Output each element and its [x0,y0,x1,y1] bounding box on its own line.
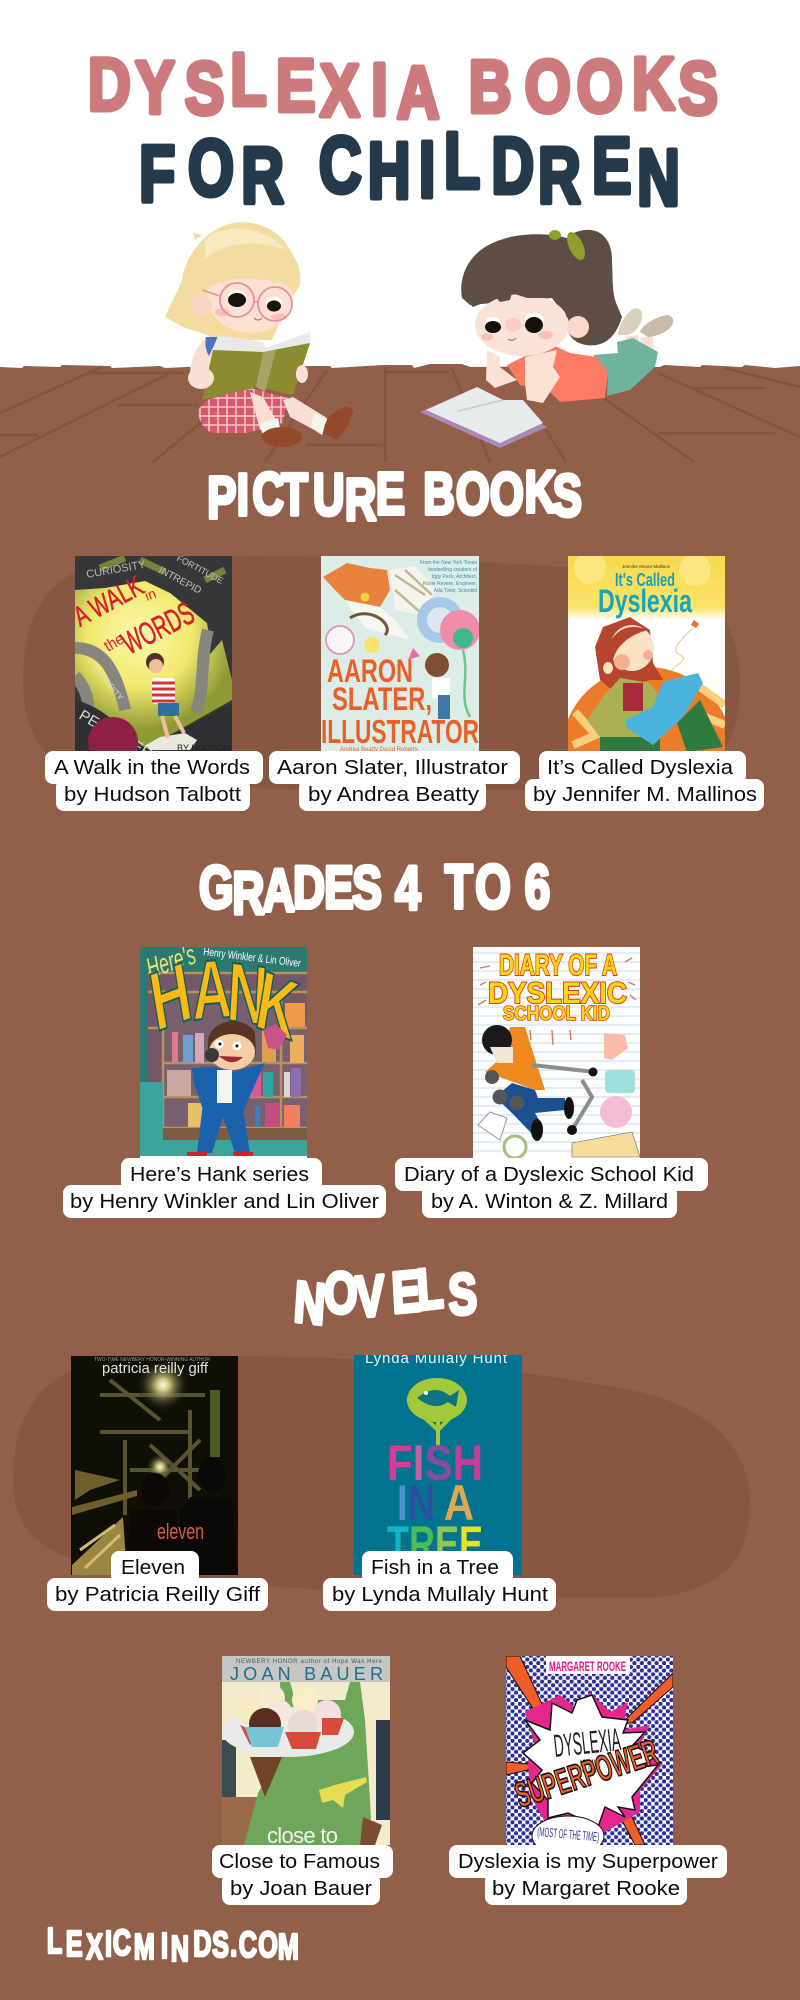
label: Here's Hank series [63,1158,386,1218]
label: Aaron Slater, Illustrator [269,751,520,811]
book cover: A Walk in the Words: INTEGRITY [90,664,125,702]
book cover: A Walk in the Words: PERSEVERE [76,707,164,767]
book cover: Dyslexia is my Superpower: IS MY [580,1757,598,1778]
book cover: Fish in a Tree: IN [397,1475,435,1531]
book cover: A Walk in the Words [75,556,232,751]
label: Fish in a Tree: by Lynda Mullaly Hunt [332,1583,548,1606]
illustration: dark-haired girl lying with book [420,229,673,448]
label: Eleven [47,1551,268,1611]
label: Close to Famous: Close to Famous [219,1850,380,1873]
book cover: Aaron Slater, Illustrator: Ada Twist, Scientist [434,588,478,594]
book cover: Diary of a Dyslexic School Kid: SCHOOL KID [503,1003,610,1025]
bangs [222,248,299,285]
book cover: Fish in a Tree: TREE [387,1516,483,1572]
book cover [202,343,310,400]
book cover: Diary of a Dyslexic School Kid [473,947,640,1158]
sleeve and body [190,337,218,375]
book cover: Close to Famous [222,1656,390,1848]
label: Aaron Slater, Illustrator: Aaron Slater, Illustrator [277,756,508,779]
book cover: Diary of a Dyslexic School Kid: DIARY OF A [499,949,617,982]
label: Diary of a Dyslexic School Kid: Diary of a Dyslexic School Kid [404,1163,694,1186]
skirt [198,388,288,433]
book cover: It's Called Dyslexia [568,556,725,751]
book cover: Eleven: eleven [157,1519,204,1544]
label: Diary of a Dyslexic School Kid [395,1158,708,1218]
book cover: Close to Famous: close to [267,1823,338,1848]
legs and socks [250,392,278,430]
illustration: blonde girl reading [165,222,353,447]
book cover: Fish in a Tree: FISH [387,1435,483,1491]
book cover: A Walk in the Words: WORDS [116,595,200,661]
label: Dyslexia is my Superpower: Dyslexia is my Superpower [458,1850,718,1873]
book cover: Dyslexia is my Superpower: MARGARET ROOKE [549,1658,626,1674]
book cover: Aaron Slater, Illustrator: SLATER, [332,681,432,717]
book cover: Fish in a Tree [354,1350,522,1575]
book cover: Aaron Slater, Illustrator: AARON [327,653,413,689]
book cover: Aaron Slater, Illustrator: Andrea Beatty David Roberts [340,747,418,753]
blob: picture books backdrop [23,556,740,790]
book cover: Aaron Slater, Illustrator: bestselling creators of [428,567,478,573]
book cover: It's Called Dyslexia: It's Called [615,570,675,590]
legs [625,335,640,345]
label: Here's Hank series: by Henry Winkler and Lin Oliver [70,1190,379,1213]
book cover: Here's Hank: Here's [142,939,199,984]
bangs [462,254,575,318]
label: Dyslexia is my Superpower: by Margaret Rooke [492,1877,680,1900]
label: Close to Famous: by Joan Bauer [230,1877,372,1900]
book cover: Aaron Slater, Illustrator: Iggy Peck, Architect, [432,574,477,580]
blob: novels backdrop [13,1356,750,1598]
shoes [618,308,642,335]
book cover: Fish in a Tree: Lynda Mullaly Hunt [365,1350,508,1367]
label: Close to Famous [212,1845,393,1905]
book cover: A Walk in the Words: A WALK [68,570,148,632]
title: Dyslexia Books: DYSLEXIABOOKS [88,39,718,135]
open book [420,387,547,448]
arms [486,350,517,388]
book cover: Eleven: patricia reilly giff [102,1360,209,1377]
face [475,294,569,356]
pants [593,338,658,396]
footer: website: LEXICMINDS.COM [47,1921,299,1969]
book cover: It's Called Dyslexia: Dyslexia [598,583,692,619]
label: Dyslexia is my Superpower [449,1845,727,1905]
book cover: Diary of a Dyslexic School Kid: DYSLEXIC [488,977,627,1010]
heading: Grades 4 to 6: GRADES [199,855,382,928]
hands [188,367,214,389]
book cover: Here's Hank [140,939,307,1158]
book cover: Here's Hank: HANK [144,943,304,1059]
book cover: Here's Hank: Henry Winkler & Lin Oliver [203,946,302,970]
book cover: A Walk in the Words: FORTITUDE [175,553,225,586]
book cover: Dyslexia is my Superpower: (MOST OF THE TIME) [537,1824,600,1844]
book cover: Eleven: TWO-TIME NEWBERY HONOR-WINNING AUTHOR [94,1357,210,1363]
eyes and glasses [228,290,246,302]
book cover: A Walk in the Words: the [102,631,127,655]
heading: Picture Books: PICTUREBOOKS [207,459,582,533]
book cover: Dyslexia is my Superpower [506,1656,673,1856]
book cover: A Walk in the Words: INTREPID [157,565,203,597]
ponytail and hair back [461,230,622,345]
label: A Walk in the Words: A Walk in the Words [54,756,250,779]
label: Fish in a Tree [323,1551,556,1611]
label: It's Called Dyslexia [525,751,764,811]
label: Eleven: Eleven [121,1556,185,1579]
book cover: Aaron Slater, Illustrator: Rosie Revere, Engineer, [423,581,477,587]
book cover: Fish in a Tree: A [444,1475,474,1531]
book cover: Close to Famous: NEWBERY HONOR author of Hope Was Here [236,1659,383,1665]
book cover: Aaron Slater, Illustrator: From the New York Times [420,560,477,566]
hair [165,222,301,340]
label: It's Called Dyslexia: It’s Called Dyslexia [547,756,734,779]
label: A Walk in the Words: by Hudson Talbott [64,783,241,806]
book cover: Aaron Slater, Illustrator [321,556,480,753]
title: For Children: FORCHILDREN [139,115,680,222]
book pages [213,332,310,354]
hair bow [563,229,589,263]
shoes [262,427,302,447]
heading: Grades 4 to 6: 4TO6 [395,852,550,923]
label: Eleven: by Patricia Reilly Giff [55,1583,260,1606]
label: Diary of a Dyslexic School Kid: by A. Winton & Z. Millard [431,1190,668,1213]
book cover: Dyslexia is my Superpower: SUPERPOWER [510,1731,663,1816]
heading: Novels: NOVELS [292,1255,478,1337]
label: A Walk in the Words [45,751,263,811]
book cover: Dyslexia is my Superpower: DYSLEXIA [552,1721,623,1764]
book cover: Aaron Slater, Illustrator: ILLUSTRATOR [321,713,479,750]
eyes [485,317,501,329]
label: It's Called Dyslexia: by Jennifer M. Mallinos [533,783,757,806]
label: Aaron Slater, Illustrator: by Andrea Beatty [308,783,480,806]
label: Here's Hank series: Here’s Hank series [130,1163,309,1186]
book cover: Eleven [71,1356,238,1575]
label: Fish in a Tree: Fish in a Tree [371,1556,499,1579]
face [208,279,292,333]
shirt [507,345,608,402]
book cover: A Walk in the Words: in [143,585,158,604]
book cover: It's Called Dyslexia: Jennifer Moore-Mallinos [622,564,671,569]
book cover: A Walk in the Words: CURIOSITY [85,559,147,581]
book cover: Close to Famous: JOAN BAUER [230,1664,383,1684]
book cover: A Walk in the Words: BY HUDSON [177,743,230,753]
